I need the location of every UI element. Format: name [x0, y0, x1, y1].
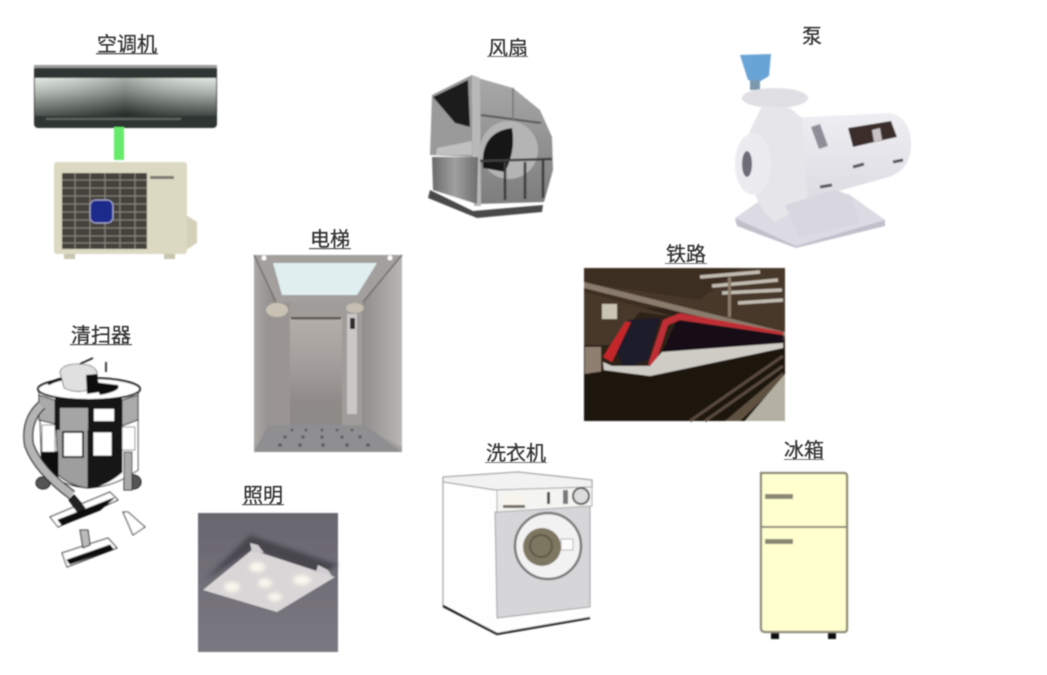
side walls — [254, 255, 275, 447]
label: refrigerator: 冰箱 — [784, 439, 824, 462]
back wall — [275, 302, 362, 425]
icon: vacuum cleaner — [28, 358, 145, 567]
image: elevator interior — [254, 255, 402, 452]
label: washing machine: 洗衣机 — [486, 442, 546, 465]
train — [615, 318, 660, 368]
ceiling frame — [254, 255, 402, 302]
icon: air conditioner — [34, 65, 217, 259]
icon: centrifugal fan — [428, 75, 553, 218]
label: fan: 风扇 — [488, 37, 528, 60]
tracks and platform — [584, 348, 785, 421]
label: vacuum cleaner: 清扫器 — [71, 324, 131, 347]
icon: washing machine — [443, 472, 592, 634]
second nozzle — [62, 538, 117, 567]
label: elevator: 电梯 — [310, 228, 350, 251]
drum — [39, 392, 138, 488]
green connecting pipe — [114, 127, 124, 160]
label: air conditioner: 空调机 — [97, 33, 157, 56]
lid — [38, 378, 140, 400]
motor head — [60, 364, 97, 392]
floor — [254, 425, 402, 452]
hose — [28, 405, 72, 495]
wheels — [36, 477, 50, 489]
icon: refrigerator — [761, 473, 847, 639]
indoor unit — [34, 65, 217, 128]
label: pump: 泵 — [802, 26, 822, 48]
outdoor unit — [54, 162, 197, 259]
image: ceiling lamp — [198, 513, 338, 652]
floor nozzle — [50, 492, 118, 527]
crevice tool — [123, 512, 145, 535]
front panel — [495, 506, 590, 618]
label: railway: 铁路 — [666, 243, 706, 266]
windows — [63, 432, 83, 457]
label: lighting: 照明 — [243, 485, 283, 507]
icon: water pump — [735, 54, 911, 248]
image: metro train — [584, 268, 785, 421]
